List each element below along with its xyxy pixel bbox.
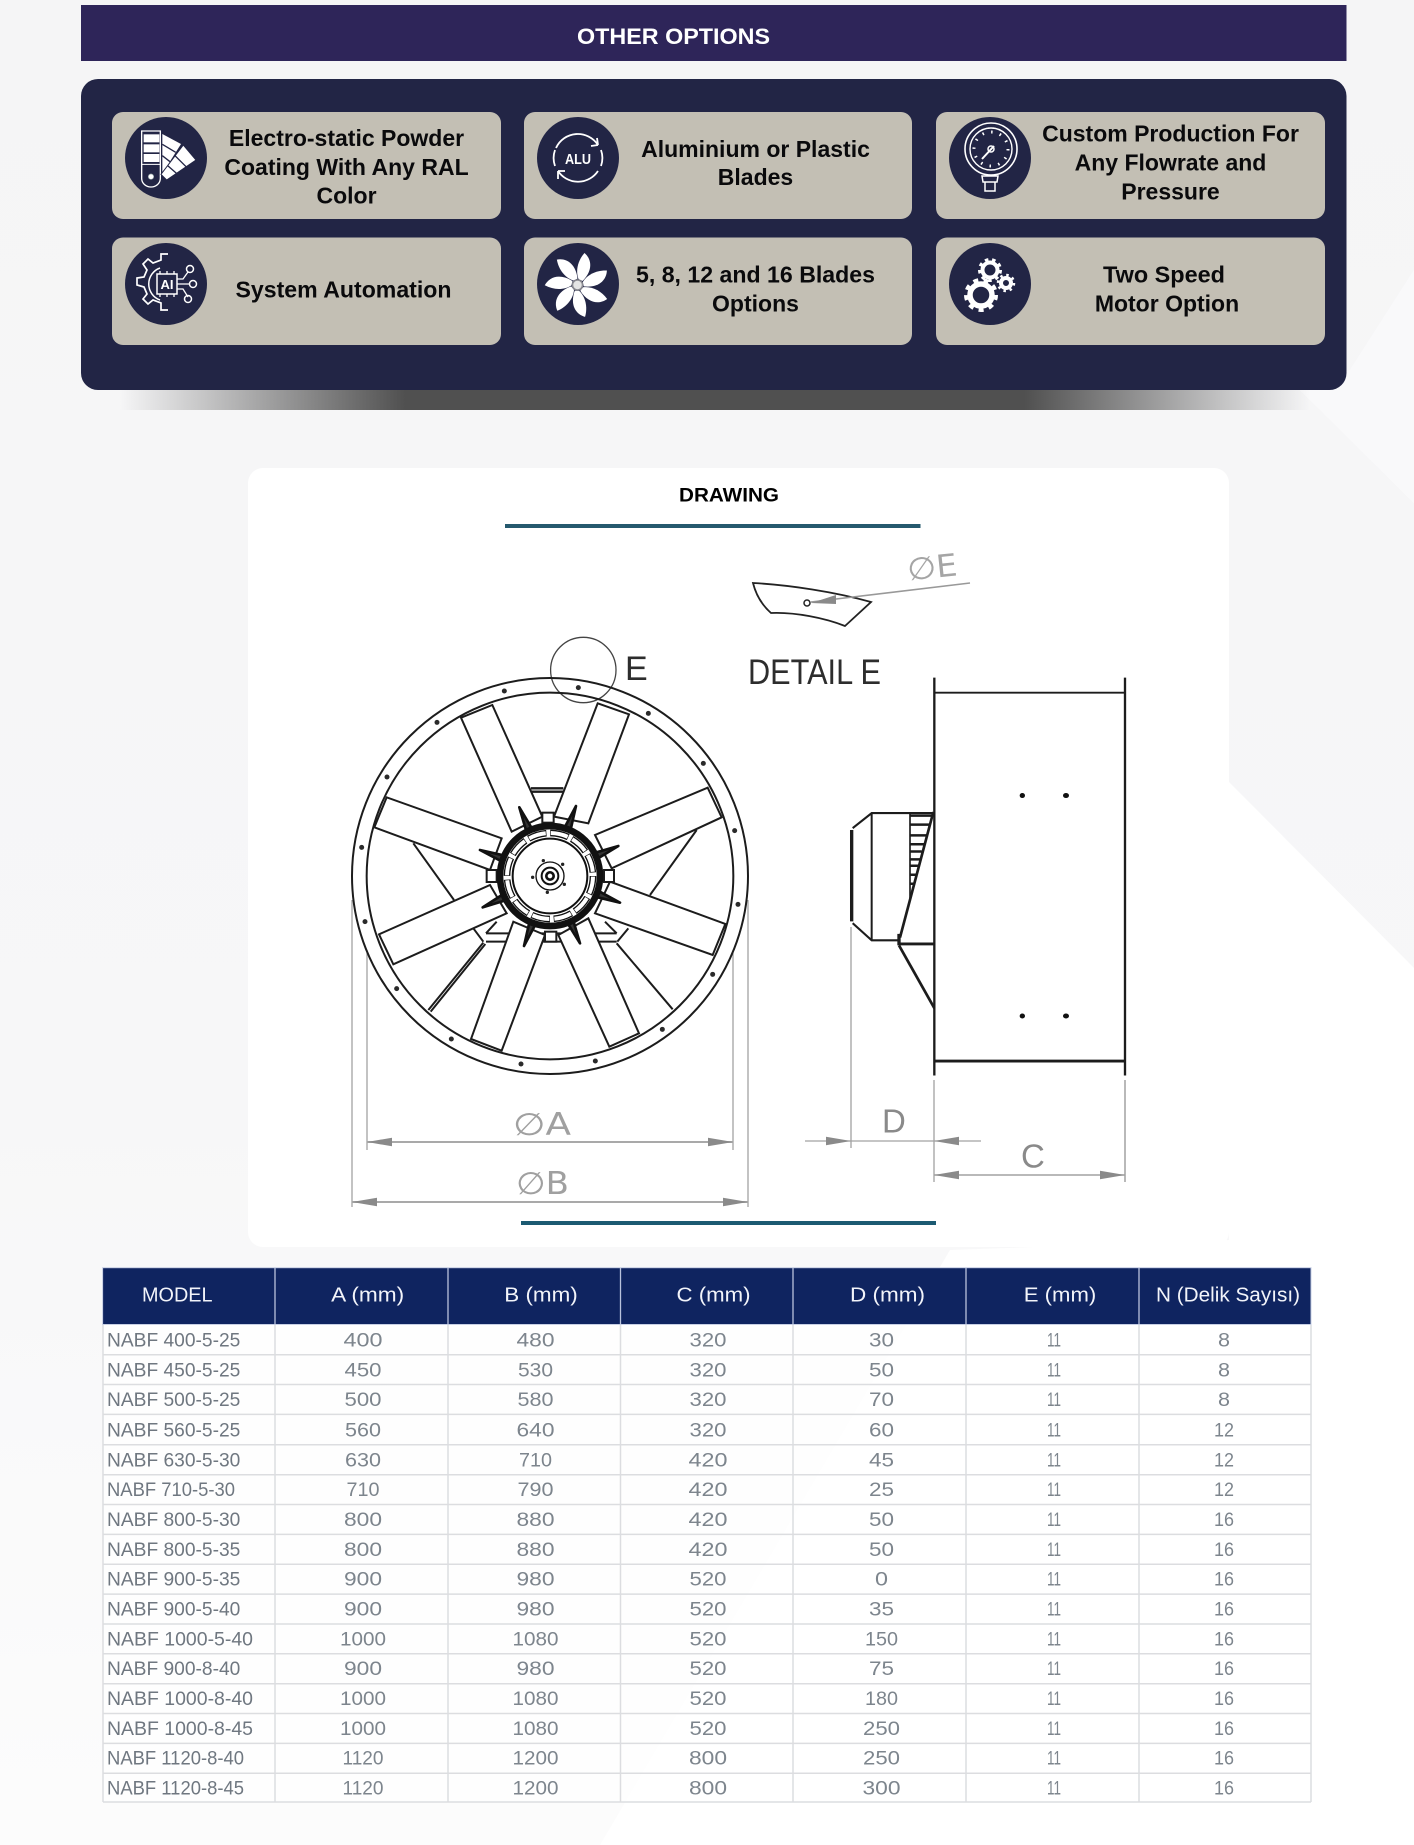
row: NABF 900-8-40: 75 [869,1659,894,1680]
row: NABF 500-5-25: 580 [518,1390,554,1411]
row: NABF 1000-8-45: 250 [863,1719,900,1740]
drawing heading: DRAWING [679,486,779,506]
row: NABF 500-5-25: NABF 500-5-25 [107,1390,240,1411]
row: NABF 450-5-25: NABF 450-5-25 [107,1360,240,1381]
row: NABF 1120-8-45: 16 [1214,1778,1234,1799]
blades [374,703,725,1051]
row: NABF 800-5-35: 11 [1047,1540,1061,1561]
row: NABF 1120-8-40: 800 [689,1749,727,1770]
row: NABF 1000-8-45: 16 [1214,1719,1234,1740]
row: NABF 800-5-30: 420 [688,1510,728,1531]
option card: two speed motor [936,238,1325,345]
row: NABF 1000-8-45 [107,1719,1234,1740]
table header [103,1268,1311,1324]
row: NABF 450-5-25: 320 [690,1360,726,1381]
row: NABF 710-5-30: 25 [869,1480,894,1501]
detail E view [748,547,970,692]
card text [641,136,870,190]
row: NABF 900-8-40: 520 [690,1659,726,1680]
table header: C (mm) [676,1284,750,1306]
icon: AI gear [125,243,207,325]
card text: Any Flowrate and [1075,150,1266,176]
row: NABF 400-5-25: 30 [869,1330,894,1352]
row: NABF 1120-8-40: 1200 [512,1749,558,1770]
row: NABF 900-5-35: 520 [690,1570,726,1591]
row: NABF 900-5-35: 11 [1047,1570,1061,1591]
row: NABF 630-5-30: 630 [345,1450,381,1471]
row: NABF 560-5-25: 11 [1047,1420,1061,1442]
row: NABF 1000-5-40: 11 [1047,1629,1061,1650]
row: NABF 560-5-25: 640 [516,1420,554,1442]
table header: D (mm) [850,1284,925,1306]
row: NABF 1120-8-40: 250 [863,1749,900,1770]
dimension: diameter B: ∅B [516,1166,569,1202]
fan front view [352,678,748,1074]
row: NABF 900-5-40: 16 [1214,1600,1234,1620]
row: NABF 1000-5-40: 150 [865,1629,898,1650]
panel: drawing [248,468,1229,1247]
row: NABF 400-5-25: 480 [516,1330,554,1352]
row: NABF 1120-8-45: 1200 [512,1778,558,1799]
row: NABF 630-5-30: NABF 630-5-30 [107,1450,240,1471]
dimension: C: C [1021,1138,1045,1174]
icon: fan impeller [537,243,619,325]
detail marker circle [551,637,648,703]
detail marker circle: E [625,650,648,688]
row: NABF 800-5-35: 880 [516,1540,554,1561]
row: NABF 400-5-25: 11 [1047,1330,1061,1352]
casing rings [352,678,748,1074]
row: NABF 400-5-25 [107,1330,1230,1352]
row: NABF 900-5-40: 900 [344,1600,382,1620]
row: NABF 710-5-30: 12 [1214,1480,1234,1501]
icon: AI gear: AI [160,277,174,292]
row: NABF 1120-8-45: 11 [1047,1778,1061,1799]
table body background [103,1325,1311,1802]
panel: other options [81,79,1346,390]
hub [500,826,600,926]
card text [1042,121,1299,204]
row: NABF 710-5-30 [107,1480,1234,1501]
row: NABF 1000-8-40: 520 [690,1689,726,1710]
row: NABF 900-8-40: 980 [516,1659,554,1680]
row: NABF 800-5-35: 50 [869,1540,894,1561]
fan side view [852,678,1125,1075]
card text: Color [316,182,377,208]
icon: gears [949,243,1031,325]
row: NABF 900-5-40: NABF 900-5-40 [107,1600,240,1620]
section heading: other options: OTHER OPTIONS [577,24,770,49]
row: NABF 400-5-25: 400 [344,1330,382,1352]
row: NABF 800-5-30: 50 [869,1510,894,1531]
detail E view: ∅E [905,547,959,589]
row: NABF 800-5-35 [107,1540,1234,1561]
table header: N (Delik Sayısı) [1156,1284,1300,1306]
card text [224,125,469,208]
row: NABF 450-5-25 [107,1360,1230,1381]
row: NABF 900-5-40 [107,1600,1234,1620]
row: NABF 1000-8-40: 11 [1047,1689,1061,1710]
row: NABF 1000-8-40: 1000 [340,1689,386,1710]
row: NABF 1120-8-45: NABF 1120-8-45 [107,1778,244,1799]
card text: 5, 8, 12 and 16 Blades [636,262,875,288]
row: NABF 1000-8-45: 520 [690,1719,726,1740]
row: NABF 1120-8-45: 800 [689,1778,727,1799]
row: NABF 400-5-25: 8 [1218,1330,1230,1352]
row: NABF 710-5-30: 710 [346,1480,380,1501]
option card: blade counts [524,238,912,345]
card text: Electro-static Powder [229,125,464,151]
dimension: D [805,927,981,1182]
row: NABF 900-5-35: 0 [875,1570,888,1591]
row: NABF 1000-8-45: 1000 [340,1719,386,1740]
row: NABF 900-5-40: 520 [690,1600,726,1620]
row: NABF 800-5-35: 16 [1214,1540,1234,1561]
row: NABF 1000-8-40: 1080 [512,1689,558,1710]
table header: A (mm) [331,1284,404,1306]
row: NABF 500-5-25: 11 [1047,1390,1061,1411]
option card: system automation [112,238,501,345]
row: NABF 800-5-35: 420 [688,1540,728,1561]
card text: Pressure [1121,178,1220,204]
row: NABF 900-5-40: 35 [869,1600,894,1620]
row: NABF 1000-5-40: NABF 1000-5-40 [107,1629,253,1650]
row: NABF 1000-5-40: 520 [690,1629,726,1650]
card text: Options [712,291,799,317]
dimension: diameter B [352,1166,748,1206]
row: NABF 710-5-30: 420 [688,1480,728,1501]
row: NABF 630-5-30: 12 [1214,1450,1234,1471]
option card: powder coating [112,112,501,219]
row: NABF 450-5-25: 50 [869,1360,894,1381]
icon: pressure gauge [949,117,1031,199]
row: NABF 1000-8-40 [107,1689,1234,1710]
row: NABF 1120-8-40: NABF 1120-8-40 [107,1749,244,1770]
casing bolts [359,685,740,1066]
row: NABF 400-5-25: NABF 400-5-25 [107,1330,240,1352]
row: NABF 630-5-30: 45 [869,1450,894,1471]
dimension: diameter A: ∅A [513,1107,571,1143]
table grid [103,1325,1311,1802]
icon: aluminium recycle: ALU [565,151,591,168]
casing [934,678,1125,1075]
panel shadow [120,390,1310,410]
row: NABF 800-5-35: 800 [344,1540,382,1561]
row: NABF 560-5-25: NABF 560-5-25 [107,1420,240,1442]
row: NABF 800-5-30: NABF 800-5-30 [107,1510,240,1531]
row: NABF 500-5-25 [107,1390,1230,1411]
row: NABF 1120-8-40 [107,1749,1234,1770]
hub stubs [487,813,614,942]
row: NABF 800-5-30 [107,1510,1234,1531]
section heading: other options [81,5,1346,61]
row: NABF 1120-8-40: 11 [1047,1749,1061,1770]
card text: System Automation [236,277,452,303]
row: NABF 500-5-25: 8 [1218,1390,1230,1411]
row: NABF 800-5-30: 16 [1214,1510,1234,1531]
row: NABF 630-5-30: 420 [688,1450,728,1471]
row: NABF 560-5-25: 560 [345,1420,381,1442]
row: NABF 500-5-25: 70 [869,1390,894,1411]
row: NABF 800-5-30: 11 [1047,1510,1061,1531]
heading rule [505,524,920,528]
row: NABF 450-5-25: 450 [344,1360,382,1381]
dimension: C [934,1080,1125,1182]
row: NABF 1000-8-40: 16 [1214,1689,1234,1710]
row: NABF 800-5-30: 880 [516,1510,554,1531]
detail E view: DETAIL E [748,653,881,692]
bottom rule [521,1221,936,1225]
row: NABF 1120-8-40: 1120 [342,1749,384,1770]
icon: colour swatch fan [125,117,207,199]
row: NABF 630-5-30: 11 [1047,1450,1061,1471]
row: NABF 900-8-40: 16 [1214,1659,1234,1680]
card text: Aluminium or Plastic [641,136,870,162]
card text: Custom Production For [1042,121,1299,147]
row: NABF 900-8-40: 11 [1047,1659,1061,1680]
row: NABF 710-5-30: 11 [1047,1480,1061,1501]
card text [1095,262,1239,317]
row: NABF 1000-8-45: 11 [1047,1719,1061,1740]
dimension: D: D [882,1102,906,1140]
dimension extension lines: front view [352,900,748,1207]
row: NABF 1000-8-40: NABF 1000-8-40 [107,1689,253,1710]
row: NABF 900-5-40: 980 [516,1600,554,1620]
row: NABF 900-5-35 [107,1570,1234,1591]
row: NABF 800-5-35: NABF 800-5-35 [107,1540,240,1561]
row: NABF 1000-8-40: 180 [865,1689,898,1710]
row: NABF 500-5-25: 320 [690,1390,726,1411]
row: NABF 900-5-35: NABF 900-5-35 [107,1570,240,1591]
card text [636,262,875,317]
table header: E (mm) [1024,1284,1096,1306]
card text: Blades [718,164,793,190]
dimension: diameter A [367,1107,733,1146]
row: NABF 1000-8-45: 1080 [512,1719,558,1740]
icon: aluminium recycle [537,117,619,199]
row: NABF 630-5-30: 710 [519,1450,552,1471]
row: NABF 1000-5-40: 1080 [512,1629,558,1650]
row: NABF 1000-5-40: 16 [1214,1629,1234,1650]
mounting holes [1020,793,1069,1018]
struts and brackets [413,788,697,1012]
row: NABF 1000-5-40 [107,1629,1234,1650]
row: NABF 1120-8-45: 300 [862,1778,900,1799]
row: NABF 710-5-30: 790 [518,1480,554,1501]
table header: MODEL [142,1284,213,1306]
data table [103,1268,1311,1802]
row: NABF 560-5-25: 12 [1214,1420,1234,1442]
row: NABF 710-5-30: NABF 710-5-30 [107,1480,235,1501]
row: NABF 1120-8-45 [107,1778,1234,1799]
row: NABF 450-5-25: 11 [1047,1360,1061,1381]
option card: blades material [524,112,912,219]
row: NABF 630-5-30 [107,1450,1234,1471]
table header: B (mm) [504,1284,578,1306]
hub spikes [480,806,620,946]
row: NABF 450-5-25: 8 [1218,1360,1230,1381]
row: NABF 800-5-30: 800 [344,1510,382,1531]
row: NABF 560-5-25: 60 [869,1420,894,1442]
row: NABF 450-5-25: 530 [518,1360,553,1381]
row: NABF 500-5-25: 500 [344,1390,382,1411]
row: NABF 1120-8-45: 1120 [342,1778,384,1799]
row: NABF 560-5-25: 320 [690,1420,726,1442]
row: NABF 1000-8-45: NABF 1000-8-45 [107,1719,253,1740]
card text: Coating With Any RAL [224,154,469,180]
motor [852,812,934,1008]
option card: custom production [936,112,1325,219]
row: NABF 900-5-40: 11 [1047,1600,1061,1620]
row: NABF 900-8-40: NABF 900-8-40 [107,1659,240,1680]
row: NABF 560-5-25 [107,1420,1234,1442]
row: NABF 900-5-35: 980 [516,1570,554,1591]
row: NABF 1120-8-40: 16 [1214,1749,1234,1770]
card text: Two Speed [1103,262,1225,288]
row: NABF 900-5-35: 900 [344,1570,382,1591]
card text: Motor Option [1095,291,1239,317]
row: NABF 900-5-35: 16 [1214,1570,1234,1591]
row: NABF 1000-5-40: 1000 [340,1629,386,1650]
row: NABF 900-8-40 [107,1659,1234,1680]
row: NABF 900-8-40: 900 [344,1659,382,1680]
row: NABF 400-5-25: 320 [690,1330,726,1352]
